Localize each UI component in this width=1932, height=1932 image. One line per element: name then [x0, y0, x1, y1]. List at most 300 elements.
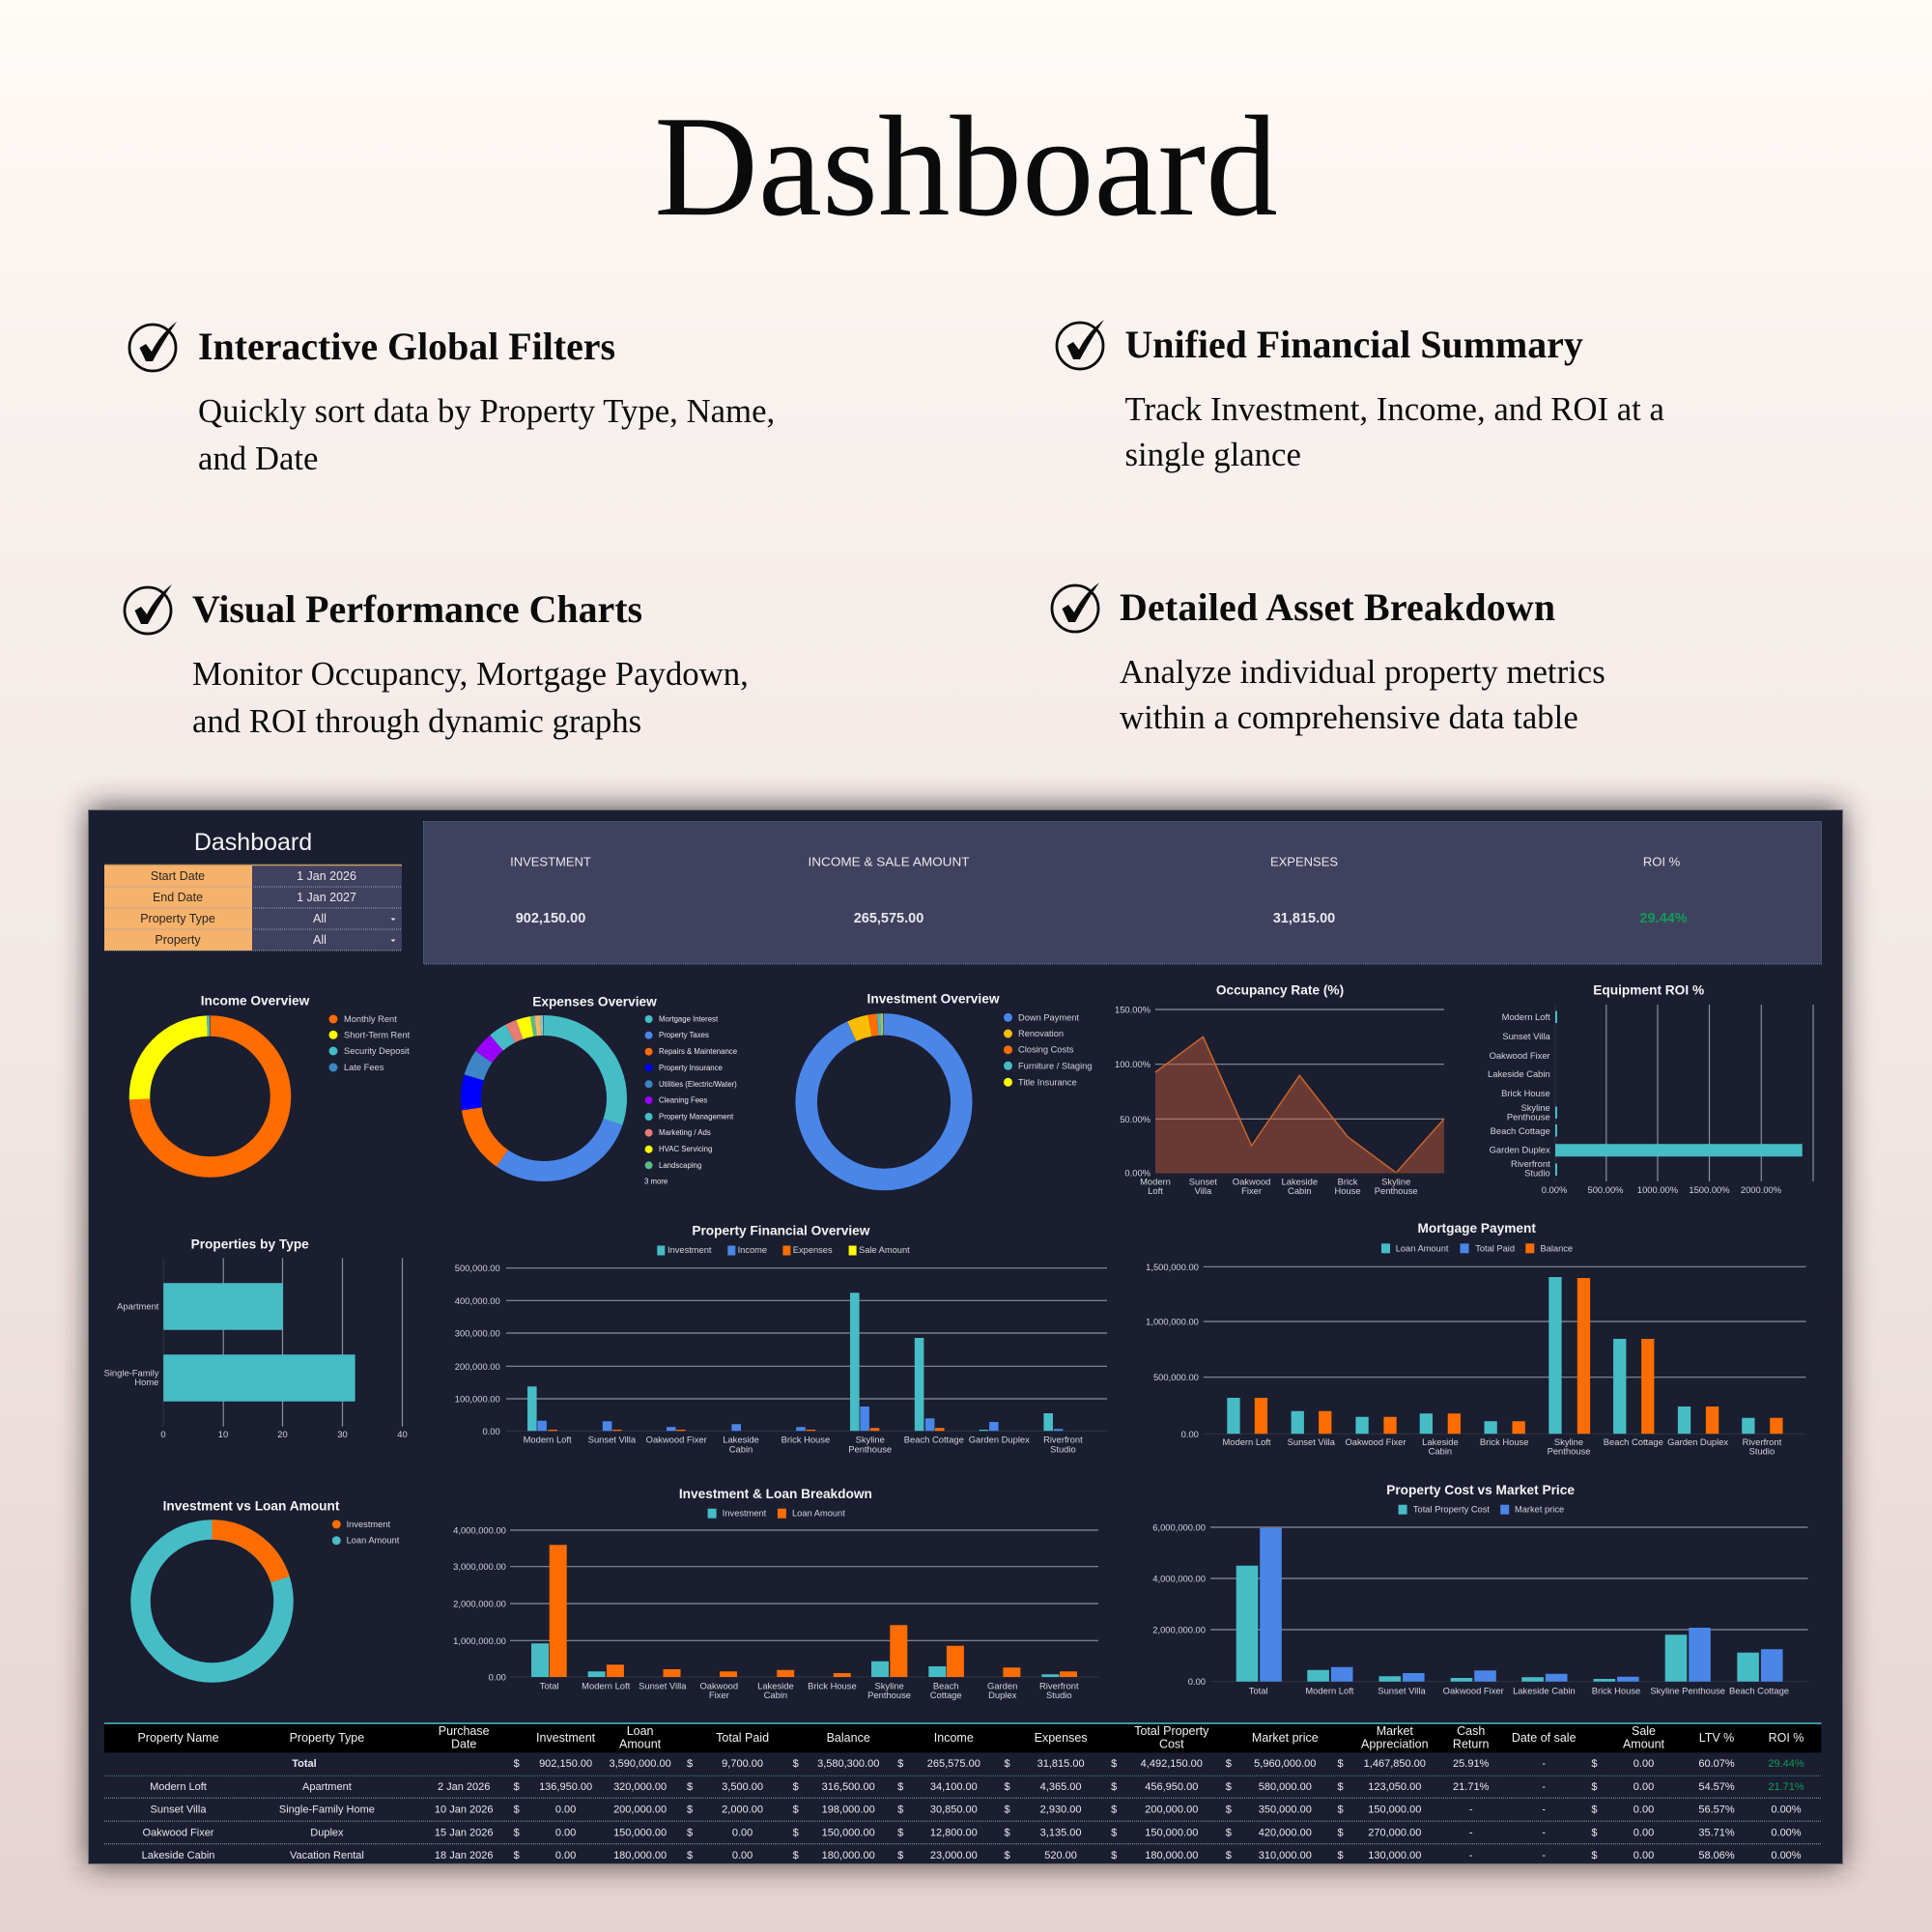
chart: Property Financial Overview: Expenses	[793, 1245, 833, 1255]
row: Modern Loft: -	[1542, 1781, 1546, 1793]
row: Sunset Villa: 200,000.00	[613, 1804, 667, 1816]
heading: Visual Performance Charts	[192, 587, 642, 631]
chart: Properties by Type	[104, 1236, 408, 1439]
table header: Loan	[627, 1724, 654, 1738]
row: Sunset Villa: 2,000.00	[722, 1804, 763, 1816]
chart: Mortgage Payment	[1146, 1221, 1806, 1456]
table header: Cost	[1159, 1738, 1184, 1751]
row: Lakeside Cabin: -	[1469, 1850, 1473, 1861]
chart: Equipment ROI bars	[1488, 983, 1813, 1195]
chart: Expenses Overview donut: HVAC Servicing	[659, 1145, 712, 1153]
heading: Unified Financial Summary	[1124, 323, 1583, 366]
chart: Mortgage Payment: Loan Amount	[1396, 1243, 1449, 1253]
chart: Expenses Overview donut: Repairs & Maintenance	[659, 1047, 737, 1056]
chart: Expenses Overview donut: Cleaning Fees	[659, 1095, 707, 1105]
chart: Equipment ROI bars: Riverfront	[1511, 1158, 1550, 1169]
chart: Investment & Loan Breakdown: Cottage	[930, 1689, 962, 1700]
chart: Investment Overview donut: Closing Costs	[1018, 1045, 1074, 1055]
chart: Properties by Type: Apartment	[117, 1300, 159, 1312]
dollar signs column: $	[1338, 1781, 1344, 1793]
chart: Property Financial Overview: Garden Duplex	[969, 1434, 1030, 1445]
row: Sunset Villa: 150,000.00	[1368, 1804, 1421, 1816]
panel: KPI summary: EXPENSES	[1270, 854, 1338, 869]
row: Lakeside Cabin: 180,000.00	[1145, 1850, 1198, 1861]
row: Sunset Villa: 10 Jan 2026	[435, 1804, 493, 1816]
chart: Occupancy Rate area: 0.00%	[1124, 1167, 1151, 1179]
icon: check circle	[129, 322, 177, 371]
dollar signs column: $	[514, 1781, 520, 1793]
panel: KPI summary: 29.44%	[1639, 911, 1688, 926]
dollar signs column: $	[1591, 1850, 1597, 1861]
chart: Equipment ROI bars: Lakeside Cabin	[1488, 1068, 1550, 1079]
row: Total: 31,815.00	[1037, 1758, 1085, 1770]
chart: Equipment ROI bars: 0.00%	[1542, 1184, 1567, 1195]
row: Sunset Villa: Sunset Villa	[151, 1804, 207, 1816]
description: and ROI through dynamic graphs	[192, 702, 641, 740]
dollar signs column: $	[793, 1804, 799, 1816]
panel shadow	[88, 807, 1843, 1866]
table header: Date	[451, 1738, 476, 1751]
chart: Property Cost vs Market Price: Lakeside Cabin	[1513, 1685, 1576, 1696]
table header: Total Paid	[716, 1731, 769, 1745]
chart: Property Financial Overview: Lakeside	[723, 1434, 759, 1445]
chart: Investment & Loan Breakdown: Cabin	[764, 1689, 787, 1700]
dollar signs column: $	[897, 1827, 903, 1838]
row: Modern Loft: 21.71%	[1453, 1781, 1490, 1793]
chart: Investment vs Loan Amount donut: Investment vs Loan Amount	[163, 1499, 340, 1513]
chart: Occupancy Rate area: Sunset	[1189, 1177, 1217, 1186]
row: Oakwood Fixer: 12,800.00	[930, 1827, 978, 1838]
chart: Occupancy Rate area	[1115, 983, 1444, 1196]
dollar signs column: $	[1111, 1758, 1117, 1770]
chart: Property Cost vs Market Price: 0.00	[1188, 1676, 1206, 1687]
dollar signs column: $	[793, 1781, 799, 1793]
chart: Property Cost vs Market Price: Market price	[1515, 1505, 1564, 1515]
panel: KPI summary: INVESTMENT	[510, 854, 591, 869]
row: Oakwood Fixer: 35.71%	[1698, 1827, 1735, 1838]
dollar signs column: $	[1004, 1804, 1010, 1816]
chart: Expenses Overview donut: 3 more	[644, 1177, 668, 1186]
dollar signs column: $	[514, 1804, 520, 1816]
chart: Occupancy Rate area: Fixer	[1241, 1184, 1262, 1196]
chart: Investment vs Loan Amount donut	[141, 1499, 400, 1673]
chart: Equipment ROI bars: Skyline	[1520, 1102, 1550, 1113]
table header: ROI %	[1769, 1731, 1804, 1745]
chart: Expenses Overview donut: Utilities (Electric/Water)	[659, 1080, 737, 1089]
chart: Occupancy Rate area: Penthouse	[1375, 1184, 1418, 1196]
chart: Investment & Loan Breakdown: 1,000,000.00	[453, 1635, 506, 1646]
chart: Investment & Loan Breakdown: Penthouse	[867, 1689, 911, 1700]
chart: Equipment ROI bars: 1000.00%	[1637, 1184, 1678, 1195]
chart: Property Financial Overview: 0.00	[482, 1426, 500, 1436]
row: Total: 25.91%	[1453, 1758, 1490, 1770]
chart: Investment & Loan Breakdown: Sunset Villa	[639, 1681, 687, 1690]
row: Modern Loft: 316,500.00	[822, 1781, 875, 1793]
chart: Mortgage Payment: Studio	[1749, 1445, 1775, 1456]
chart: Property Cost vs Market Price: Skyline Penthouse	[1650, 1685, 1725, 1696]
chart: Investment & Loan Breakdown: Loan Amount	[792, 1509, 845, 1519]
chart: Property Cost vs Market Price: Brick House	[1592, 1685, 1640, 1696]
row: Lakeside Cabin	[142, 1850, 1802, 1861]
row: Oakwood Fixer: 150,000.00	[822, 1827, 875, 1838]
chart: Investment & Loan Breakdown: Modern Loft	[582, 1681, 631, 1690]
table header: Market	[1377, 1724, 1413, 1738]
heading: Interactive Global Filters	[198, 325, 615, 368]
table header: Sale	[1632, 1724, 1656, 1738]
table header: Investment	[536, 1731, 596, 1745]
dollar signs column: $	[1004, 1758, 1010, 1770]
description: and Date	[198, 440, 318, 477]
dollar signs column: $	[897, 1804, 903, 1816]
dollar signs column: $	[1111, 1804, 1117, 1816]
title: Dashboard	[654, 87, 1278, 246]
row: Total: 4,492,150.00	[1141, 1758, 1203, 1770]
row: Oakwood Fixer: -	[1542, 1827, 1546, 1838]
chart: Investment & Loan Breakdown: Total	[540, 1681, 559, 1690]
row: Lakeside Cabin: Vacation Rental	[290, 1850, 364, 1861]
row: Total: Total	[292, 1758, 317, 1770]
row: Modern Loft: 136,950.00	[539, 1781, 592, 1793]
dollar signs column: $	[793, 1827, 799, 1838]
dollar signs column: $	[1226, 1781, 1232, 1793]
chart: Property Cost vs Market Price: Oakwood Fixer	[1443, 1685, 1504, 1696]
chart: Mortgage Payment: Cabin	[1429, 1445, 1452, 1456]
chart: Property Financial Overview: Penthouse	[848, 1443, 892, 1454]
row: Modern Loft: 54.57%	[1698, 1781, 1735, 1793]
row: Oakwood Fixer: Duplex	[310, 1827, 344, 1838]
row: Oakwood Fixer: 0.00%	[1771, 1827, 1802, 1838]
dollar signs column: $	[687, 1758, 693, 1770]
row: Sunset Villa: 0.00	[555, 1804, 576, 1816]
row: Oakwood Fixer: 3,135.00	[1040, 1827, 1082, 1838]
chart: Mortgage Payment: 0.00	[1181, 1429, 1199, 1439]
chart: Mortgage Payment: Garden Duplex	[1667, 1436, 1728, 1447]
table header: Property Name	[137, 1731, 219, 1745]
panel: KPI summary: 31,815.00	[1273, 911, 1335, 926]
chart: Occupancy Rate area: Skyline	[1381, 1177, 1410, 1186]
dollar signs column: $	[687, 1804, 693, 1816]
chart: Property Financial Overview: 400,000.00	[455, 1295, 500, 1306]
chart: Property Financial Overview	[455, 1223, 1107, 1454]
chart: Mortgage Payment: Skyline	[1554, 1436, 1583, 1447]
chart: Property Cost vs Market Price: Beach Cottage	[1729, 1685, 1789, 1696]
feature: Interactive Global Filters	[129, 322, 775, 477]
chart: Property Financial Overview: 300,000.00	[455, 1327, 500, 1339]
chart: Income Overview donut: Income Overview	[201, 993, 310, 1009]
row: Sunset Villa: -	[1542, 1804, 1546, 1816]
chart: Property Cost vs Market Price: Total	[1249, 1685, 1268, 1696]
chart: Expenses Overview donut: Property Management	[659, 1113, 734, 1121]
panel: filters: 1 Jan 2027	[297, 891, 356, 904]
chart: Properties by Type: 0	[160, 1429, 166, 1439]
row: Modern Loft: 0.00	[1634, 1781, 1654, 1793]
row: Oakwood Fixer: 0.00	[1634, 1827, 1654, 1838]
table: property details	[104, 1723, 1822, 1861]
chart: Expenses Overview donut: Property Insurance	[659, 1064, 723, 1072]
chart: Property Financial Overview: Riverfront	[1043, 1434, 1083, 1445]
feature: Visual Performance Charts	[125, 584, 749, 740]
dollar signs column: $	[1591, 1827, 1597, 1838]
row: Lakeside Cabin: -	[1542, 1850, 1546, 1861]
row: Total	[292, 1758, 1804, 1770]
row: Total: 3,580,300.00	[817, 1758, 879, 1770]
row: Sunset Villa: 56.57%	[1698, 1804, 1735, 1816]
chart: Equipment ROI bars: Modern Loft	[1502, 1011, 1550, 1022]
row: Oakwood Fixer: 270,000.00	[1368, 1827, 1421, 1838]
dollar signs column: $	[687, 1827, 693, 1838]
dollar signs column: $	[1338, 1850, 1344, 1861]
dollar signs column: $	[793, 1850, 799, 1861]
chart: Occupancy Rate area: Loft	[1148, 1184, 1163, 1196]
chart: Properties by Type: 30	[337, 1429, 348, 1439]
chart: Mortgage Payment: Total Paid	[1475, 1243, 1515, 1253]
row: Lakeside Cabin: 0.00	[732, 1850, 753, 1861]
chart: Equipment ROI bars: Oakwood Fixer	[1490, 1050, 1550, 1061]
row: Total: 3,590,000.00	[609, 1758, 671, 1770]
row: Lakeside Cabin: 520.00	[1044, 1850, 1077, 1861]
heading: Detailed Asset Breakdown	[1120, 585, 1555, 629]
chart: Mortgage Payment: Mortgage Payment	[1417, 1221, 1536, 1236]
chart: Investment Overview donut: Furniture / Staging	[1018, 1061, 1092, 1070]
chart: Investment & Loan Breakdown: 4,000,000.00	[453, 1524, 506, 1536]
dollar signs column	[514, 1758, 1597, 1861]
row: Modern Loft: 580,000.00	[1259, 1781, 1312, 1793]
row: Sunset Villa: 2,930.00	[1040, 1804, 1082, 1816]
dollar signs column: $	[1338, 1827, 1344, 1838]
chart: Expenses Overview donut: Property Taxes	[659, 1031, 709, 1039]
row: Oakwood Fixer: 420,000.00	[1259, 1827, 1312, 1838]
chart: Property Cost vs Market Price	[1152, 1483, 1808, 1696]
icon: check circle	[1052, 582, 1099, 632]
chart: Income Overview donut: Late Fees	[344, 1063, 384, 1072]
panel: filters: 1 Jan 2026	[297, 869, 356, 883]
dollar signs column: $	[1226, 1827, 1232, 1838]
dollar signs column: $	[1226, 1758, 1232, 1770]
chart: Investment & Loan Breakdown: Fixer	[709, 1689, 729, 1700]
icon: check circle	[125, 584, 172, 634]
chart: Occupancy Rate area: 150.00%	[1115, 1005, 1151, 1014]
row: Oakwood Fixer: Oakwood Fixer	[143, 1827, 214, 1838]
panel: KPI summary	[423, 821, 1822, 964]
row: Sunset Villa: 198,000.00	[822, 1804, 875, 1816]
chart: Property Financial Overview: Studio	[1050, 1443, 1076, 1454]
chart: Property Financial Overview: Cabin	[729, 1443, 753, 1454]
panel: KPI summary: 265,575.00	[854, 911, 923, 926]
chart: Equipment ROI bars: Garden Duplex	[1490, 1144, 1550, 1155]
chart: Expenses Overview donut: Mortgage Interest	[659, 1014, 719, 1024]
feature: Unified Financial Summary	[1057, 320, 1664, 473]
row: Lakeside Cabin: 58.06%	[1698, 1850, 1735, 1861]
chart: Mortgage Payment: Penthouse	[1548, 1445, 1590, 1456]
chart: Investment & Loan Breakdown: Studio	[1046, 1689, 1072, 1700]
chart: Equipment ROI bars: 2000.00%	[1741, 1184, 1781, 1195]
panel: filters: All	[313, 933, 327, 947]
chart: Investment & Loan Breakdown: Investment	[723, 1509, 767, 1519]
table header: Income	[934, 1731, 974, 1745]
row: Modern Loft: Apartment	[302, 1781, 352, 1793]
table header: Market price	[1252, 1731, 1319, 1745]
chart: Investment & Loan Breakdown: Skyline	[874, 1681, 904, 1690]
row: Modern Loft: 4,365.00	[1040, 1781, 1082, 1793]
chart: Income Overview donut: Short-Term Rent	[344, 1030, 411, 1039]
table header: Property Type	[290, 1731, 364, 1745]
chart: Property Financial Overview: Brick House	[781, 1434, 830, 1445]
dollar signs column: $	[687, 1850, 693, 1861]
chart: Properties by Type: Properties by Type	[191, 1236, 309, 1252]
dollar signs column: $	[1004, 1781, 1010, 1793]
chart: Property Financial Overview: Sale Amount	[859, 1245, 910, 1255]
table header: Expenses	[1035, 1731, 1088, 1745]
chart: Income Overview donut: Monthly Rent	[344, 1014, 397, 1024]
chart: Property Financial Overview: 500,000.00	[455, 1263, 500, 1273]
chart: Occupancy Rate area: House	[1334, 1184, 1361, 1196]
chart: Equipment ROI bars: Beach Cottage	[1491, 1125, 1550, 1136]
chart: Properties by Type: 20	[277, 1429, 288, 1439]
chart: Equipment ROI bars: Equipment ROI %	[1593, 983, 1704, 997]
chart: Property Financial Overview: Oakwood Fixer	[646, 1434, 707, 1445]
panel: KPI summary: 902,150.00	[516, 911, 585, 926]
chart: Investment & Loan Breakdown: Beach	[933, 1681, 958, 1690]
chart: Properties by Type: Single-Family	[104, 1368, 158, 1378]
row: Lakeside Cabin: 0.00	[555, 1850, 576, 1861]
row: Total: 5,960,000.00	[1254, 1758, 1316, 1770]
chart: Property Cost vs Market Price: 4,000,000.00	[1152, 1573, 1206, 1584]
dollar signs column: $	[1111, 1850, 1117, 1861]
chart: Occupancy Rate area: 100.00%	[1115, 1059, 1151, 1069]
chart: Properties by Type: 10	[218, 1429, 228, 1439]
row: Oakwood Fixer: 150,000.00	[1145, 1827, 1198, 1838]
chart: Mortgage Payment: Beach Cottage	[1604, 1436, 1663, 1447]
chart: Properties by Type: 40	[397, 1429, 408, 1439]
chart: Property Financial Overview: Income	[738, 1245, 767, 1255]
table header	[137, 1724, 1804, 1751]
chart: Property Cost vs Market Price: Sunset Villa	[1378, 1685, 1426, 1696]
chart: Investment & Loan Breakdown: Duplex	[988, 1689, 1017, 1700]
row: Oakwood Fixer: 15 Jan 2026	[435, 1827, 493, 1838]
chart: Occupancy Rate area: Brick	[1338, 1177, 1357, 1186]
dollar signs column: $	[1004, 1850, 1010, 1861]
row: Oakwood Fixer: 0.00	[732, 1827, 753, 1838]
dollar signs column: $	[1226, 1804, 1232, 1816]
chart: Property Financial Overview: 200,000.00	[455, 1361, 500, 1372]
chart: Mortgage Payment: 1,000,000.00	[1146, 1316, 1199, 1327]
chart: Property Financial Overview: Skyline	[856, 1434, 885, 1445]
chart: Investment & Loan Breakdown: 3,000,000.00	[453, 1561, 506, 1572]
table header: LTV %	[1699, 1731, 1734, 1745]
dollar signs column: $	[1111, 1827, 1117, 1838]
row: Oakwood Fixer: 0.00	[555, 1827, 576, 1838]
chart: Equipment ROI bars: 500.00%	[1587, 1184, 1624, 1195]
chart: Mortgage Payment: Brick House	[1480, 1436, 1528, 1447]
row: Modern Loft: 34,100.00	[930, 1781, 978, 1793]
chart: Property Cost vs Market Price: Total Property Cost	[1413, 1505, 1490, 1515]
row: Sunset Villa: 0.00%	[1771, 1804, 1802, 1816]
row: Modern Loft: 456,950.00	[1145, 1781, 1198, 1793]
dollar signs column: $	[514, 1850, 520, 1861]
row: Total: -	[1542, 1758, 1546, 1770]
chart: Property Cost vs Market Price: Property Cost vs Market Price	[1386, 1483, 1575, 1497]
row: Sunset Villa: Single-Family Home	[279, 1804, 375, 1816]
chart: Occupancy Rate area: Villa	[1195, 1184, 1212, 1196]
chart: Income Overview donut	[139, 993, 411, 1167]
chart: Investment vs Loan Amount donut: Investment	[347, 1520, 390, 1529]
panel: KPI summary: ROI %	[1643, 854, 1681, 869]
chart: Property Financial Overview: Investment	[668, 1245, 712, 1255]
chart: Investment & Loan Breakdown: 0.00	[489, 1671, 506, 1683]
row: Modern Loft: 320,000.00	[613, 1781, 667, 1793]
chart: Mortgage Payment: Lakeside	[1422, 1436, 1459, 1447]
row: Lakeside Cabin: 23,000.00	[930, 1850, 978, 1861]
dollar signs column: $	[1111, 1781, 1117, 1793]
chart: Property Cost vs Market Price: 6,000,000.00	[1152, 1522, 1206, 1532]
table header: Date of sale	[1512, 1731, 1577, 1745]
row: Lakeside Cabin: 180,000.00	[613, 1850, 667, 1861]
row: Lakeside Cabin: 130,000.00	[1368, 1850, 1421, 1861]
chart: Occupancy Rate area: Modern	[1140, 1177, 1171, 1186]
row: Lakeside Cabin: 0.00	[1634, 1850, 1654, 1861]
chart: Investment & Loan Breakdown	[453, 1487, 1098, 1700]
chart: Property Financial Overview: Modern Loft	[524, 1434, 572, 1445]
description: Quickly sort data by Property Type, Name,	[198, 392, 775, 430]
chart: Expenses Overview donut: Landscaping	[659, 1161, 701, 1170]
row: Total: 902,150.00	[539, 1758, 592, 1770]
description: Track Investment, Income, and ROI at a	[1124, 390, 1664, 428]
row: Total: 0.00	[1634, 1758, 1654, 1770]
row: Lakeside Cabin: 0.00%	[1771, 1850, 1802, 1861]
dollar signs column: $	[1338, 1804, 1344, 1816]
row: Oakwood Fixer: 150,000.00	[613, 1827, 667, 1838]
chart: Investment & Loan Breakdown: 2,000,000.00	[453, 1598, 506, 1609]
row: Lakeside Cabin: Lakeside Cabin	[142, 1850, 214, 1861]
chart: Mortgage Payment: Sunset Villa	[1288, 1436, 1336, 1447]
table header: Appreciation	[1361, 1738, 1429, 1751]
chart: Expenses Overview donut: Marketing / Ads	[659, 1128, 711, 1137]
chart: Investment & Loan Breakdown: Investment & Loan Breakdown	[679, 1487, 872, 1501]
chart: Equipment ROI bars: 1500.00%	[1689, 1184, 1730, 1195]
icon: check circle	[1057, 320, 1104, 369]
panel: filters: End Date	[153, 891, 203, 904]
description: Monitor Occupancy, Mortgage Paydown,	[192, 655, 749, 693]
panel: filters: Start Date	[151, 869, 205, 883]
chart: Mortgage Payment: Modern Loft	[1222, 1436, 1271, 1447]
dollar signs column: $	[1591, 1758, 1597, 1770]
dollar signs column: $	[897, 1758, 903, 1770]
dollar signs column: $	[793, 1758, 799, 1770]
chart: Investment & Loan Breakdown: Garden	[987, 1681, 1017, 1690]
chart: Investment Overview donut	[807, 991, 1092, 1179]
chart: Property Financial Overview: 100,000.00	[455, 1393, 500, 1405]
row: Sunset Villa: 0.00	[1634, 1804, 1654, 1816]
chart: Occupancy Rate area: Lakeside	[1282, 1177, 1318, 1186]
row: Total: 9,700.00	[722, 1758, 763, 1770]
chart: Investment Overview donut: Down Payment	[1018, 1012, 1079, 1022]
description: Analyze individual property metrics	[1120, 653, 1605, 691]
chart: Investment Overview donut: Investment Overview	[867, 991, 1000, 1007]
description: single glance	[1124, 436, 1301, 473]
chart: Expenses Overview donut	[471, 995, 737, 1186]
panel: filters	[104, 865, 402, 951]
chart: Property Financial Overview: Beach Cottage	[904, 1434, 964, 1445]
dollar signs column: $	[1591, 1781, 1597, 1793]
panel: KPI summary: INCOME & SALE AMOUNT	[808, 854, 970, 869]
dollar signs column: $	[514, 1758, 520, 1770]
panel: filters: Property Type	[140, 912, 215, 925]
table header: Return	[1453, 1738, 1490, 1751]
chart: Occupancy Rate area: Occupancy Rate (%)	[1216, 983, 1344, 997]
chart: Mortgage Payment: 1,500,000.00	[1146, 1262, 1199, 1272]
dollar signs column: $	[1338, 1758, 1344, 1770]
dashboard heading: Dashboard	[194, 829, 312, 856]
